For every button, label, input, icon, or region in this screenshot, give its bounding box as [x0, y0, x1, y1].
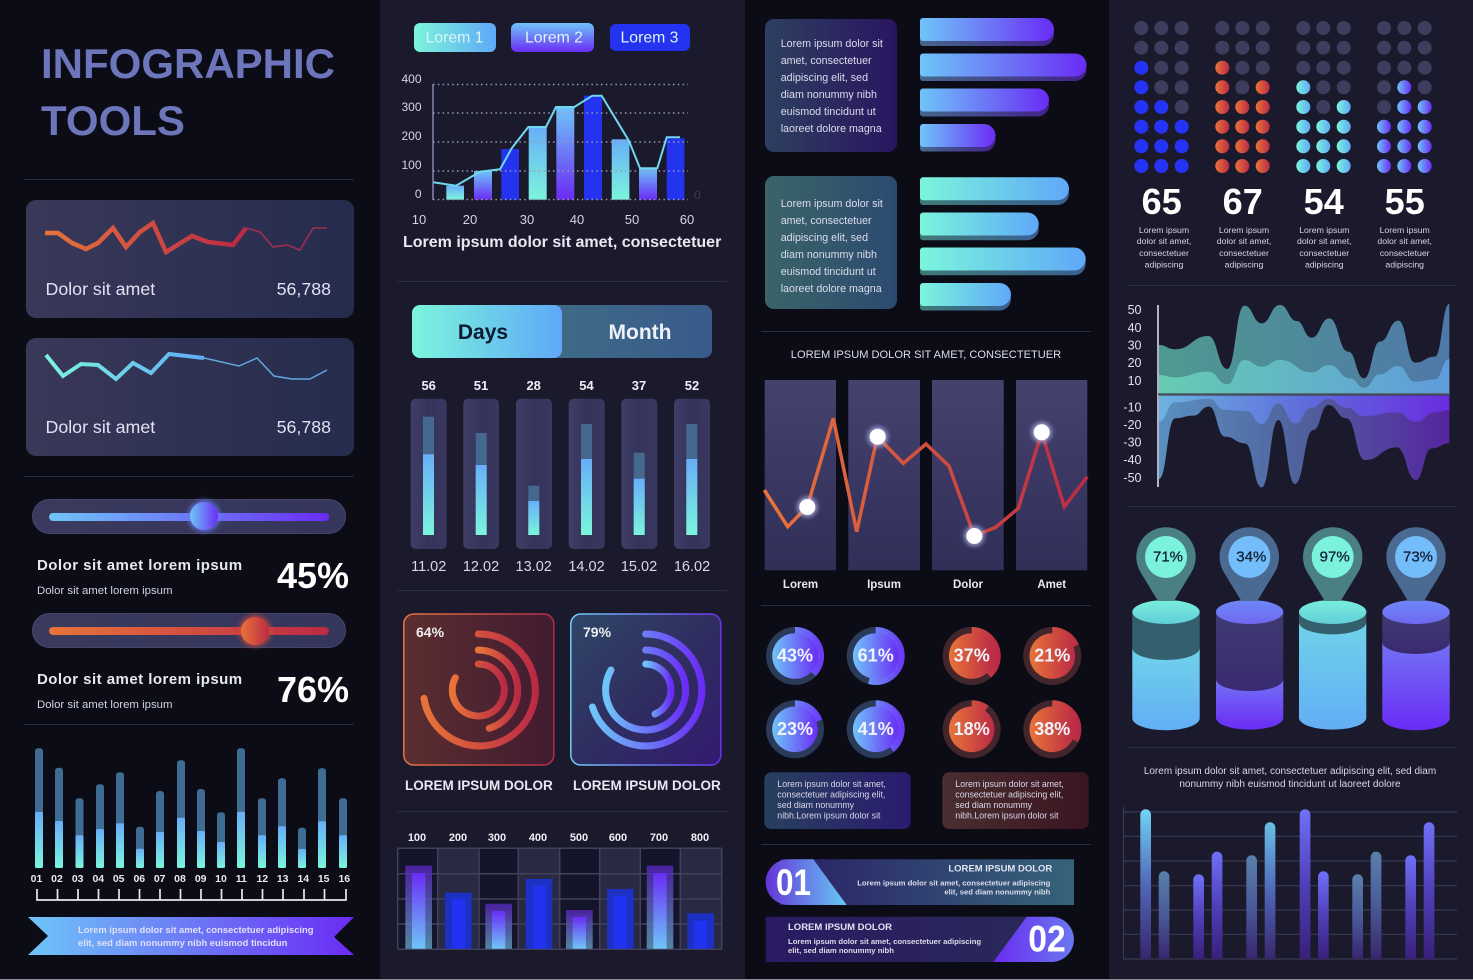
cylinder: 73% — [1382, 527, 1450, 730]
note: red — [942, 772, 1089, 829]
mirrored area chart: 40 — [1128, 321, 1142, 335]
card: orange sparkline: 56,788 — [277, 279, 331, 299]
combo chart: Lorem ipsum dolor sit amet, consectetuer — [403, 234, 721, 251]
column gauges: 14.02 — [568, 559, 605, 575]
bar chart: 16 bars: 08 — [174, 873, 186, 885]
legend buttons: Lorem 3 — [621, 30, 679, 46]
dot matrix: 55: adipiscing — [1385, 260, 1424, 270]
ribbon banner: elit, sed diam nonummy nibh euismod tincidun — [78, 937, 288, 948]
dot matrix: 65: dolor sit amet, — [1137, 236, 1191, 246]
radial card: 79%: LOREM IPSUM DOLOR — [573, 778, 721, 793]
ribbon banner: Lorem ipsum dolor sit amet, consectetuer adipiscing — [78, 924, 314, 935]
donut: red group: 37% — [954, 646, 990, 666]
donut: red group — [943, 627, 1081, 758]
mirrored area chart: 30 — [1128, 338, 1142, 352]
dot matrix: 55: 55 — [1385, 181, 1425, 222]
radial card: 79%: 79% — [583, 624, 612, 640]
note: red: nibh.Lorem ipsum dolor sit — [955, 810, 1059, 820]
horizontal bars: violet — [920, 18, 1086, 152]
dot matrix: 55 — [1377, 21, 1432, 270]
card: teal sparkline: Dolor sit amet — [46, 417, 155, 437]
panel: left column — [0, 0, 380, 980]
column gauges: 54 — [579, 378, 594, 393]
combo chart: 10 — [412, 212, 426, 227]
combo chart: 50 — [625, 212, 639, 227]
grid bar chart: 200 — [449, 832, 467, 844]
dot matrix: 67 — [1215, 21, 1271, 270]
note: red: Lorem ipsum dolor sit amet, — [955, 779, 1064, 789]
title: TOOLS — [41, 97, 185, 144]
bar chart: 16 bars: 03 — [72, 873, 84, 885]
note card: violet: diam nonummy nibh — [781, 89, 877, 101]
grid bar chart: 600 — [609, 832, 627, 844]
panel: fourth column — [1109, 0, 1473, 980]
note card: violet — [765, 19, 897, 152]
column gauges: 16.02 — [674, 559, 710, 575]
dot matrix: 54: Lorem ipsum — [1299, 225, 1349, 235]
banner: 01: LOREM IPSUM DOLOR — [948, 864, 1052, 875]
cylinder: 71% — [1132, 527, 1200, 730]
note card: violet: Lorem ipsum dolor sit — [781, 38, 883, 50]
radial card: 64%: LOREM IPSUM DOLOR — [405, 778, 553, 793]
bar chart: 16 bars: 16 — [338, 873, 350, 885]
column gauges: 51 — [474, 378, 488, 393]
bar chart: 16 bars: 07 — [154, 873, 166, 885]
slider: 45%: 45% — [277, 555, 349, 596]
bar chart: 16 bars: 01 — [31, 873, 42, 885]
bar chart: 16 bars: 02 — [51, 873, 63, 885]
line chart with four panels — [764, 380, 1087, 591]
donut: blue group: 61% — [858, 646, 894, 666]
card: teal sparkline — [26, 338, 354, 456]
horizontal bars: teal — [920, 177, 1086, 310]
mirrored area chart: -40 — [1123, 453, 1142, 467]
note card: violet: euismod tincidunt ut — [781, 106, 876, 118]
banner: 02: LOREM IPSUM DOLOR — [788, 922, 892, 933]
toggle: days / month: Days — [458, 321, 508, 344]
dot matrix: 67: consectetuer — [1219, 248, 1269, 258]
panel: second column — [380, 0, 745, 980]
combo chart — [401, 72, 721, 251]
mirrored area chart: 20 — [1128, 356, 1142, 370]
banner: 01: Lorem ipsum dolor sit amet, consectetuer adipiscing — [857, 878, 1051, 888]
grid bar chart: 300 — [488, 832, 506, 844]
text block: Lorem ipsum dolor sit amet, consectetuer adipiscing elit, sed diam — [1144, 766, 1436, 777]
banner: 02: Lorem ipsum dolor sit amet, consectetuer adipiscing — [788, 937, 981, 946]
grid bar chart: 500 — [570, 832, 588, 844]
combo chart: 30 — [520, 212, 534, 227]
title: INFOGRAPHIC — [41, 40, 335, 87]
combo chart: 100 — [401, 158, 422, 172]
banner: 01: elit, sed diam nonummy nibh — [944, 888, 1051, 896]
mirrored area chart: -30 — [1123, 436, 1142, 450]
column gauges: 11.02 — [411, 559, 446, 575]
dot matrix: 67: Lorem ipsum — [1219, 225, 1269, 235]
column gauges: 12.02 — [463, 559, 499, 575]
banner: 01 — [766, 859, 1074, 905]
column gauges: 37 — [632, 378, 646, 393]
donut: red group: 21% — [1034, 646, 1070, 666]
note: blue: nibh.Lorem ipsum dolor sit — [777, 810, 881, 820]
dot matrix: 67: 67 — [1223, 181, 1263, 222]
dot matrix: 54: dolor sit amet, — [1297, 236, 1352, 246]
ribbon banner — [28, 917, 354, 955]
bar chart: 16 bars: 14 — [297, 873, 309, 885]
slider: 76% — [32, 614, 349, 711]
bar chart: 16 bars: 10 — [215, 873, 227, 885]
dot matrix: 67: dolor sit amet, — [1217, 236, 1271, 246]
dot matrix: 65: consectetuer — [1139, 248, 1189, 258]
grid bar chart: 400 — [529, 832, 547, 844]
legend buttons: Lorem 1 — [426, 30, 484, 46]
donut: red group: 18% — [954, 719, 990, 739]
slider: 45%: Dolor sit amet lorem ipsum — [37, 557, 243, 574]
bar chart: 16 bars — [31, 748, 350, 900]
grid bar chart: 100 — [408, 832, 426, 844]
slider: 76%: Dolor sit amet lorem ipsum — [37, 671, 243, 688]
card: orange sparkline: Dolor sit amet — [46, 279, 155, 299]
note card: teal: diam nonummy nibh — [781, 249, 877, 261]
cylinder: 71%: 71% — [1153, 549, 1183, 566]
text block — [1144, 766, 1436, 790]
combo chart: 20 — [463, 212, 477, 227]
cylinder: 97% — [1299, 527, 1366, 730]
dot matrix: 55: dolor sit amet, — [1377, 236, 1432, 246]
bar chart: 16 bars: 13 — [277, 873, 289, 885]
mirrored area chart: -20 — [1123, 418, 1142, 432]
combo chart: 0 — [694, 188, 701, 202]
rounded bar chart — [1124, 807, 1457, 959]
note: blue: Lorem ipsum dolor sit amet, — [777, 779, 886, 789]
card: teal sparkline: 56,788 — [277, 417, 331, 437]
dot matrix: 54: 54 — [1304, 181, 1344, 222]
bar chart: 16 bars: 04 — [92, 873, 104, 885]
dot matrix: 65: Lorem ipsum — [1139, 225, 1189, 235]
panel: third column — [745, 0, 1109, 980]
radial card: 79% — [571, 614, 721, 793]
combo chart: 60 — [680, 212, 694, 227]
combo chart: 300 — [401, 100, 422, 114]
bar chart: 16 bars: 15 — [318, 873, 330, 885]
note: blue: sed diam nonummy — [777, 800, 855, 810]
grid bar chart: 700 — [650, 832, 668, 844]
legend buttons: Lorem 2 — [525, 30, 583, 46]
donut: blue group: 43% — [777, 646, 813, 666]
note: red: consectetuer adipiscing elit, — [955, 790, 1063, 800]
donut: red group: 38% — [1034, 719, 1070, 739]
mirrored area chart — [1123, 303, 1450, 487]
cylinder: 34%: 34% — [1236, 549, 1266, 566]
slider: 76%: Dolor sit amet lorem ipsum — [37, 699, 172, 711]
note card: teal: adipiscing elit, sed — [781, 232, 868, 244]
note card: violet: laoreet dolore magna — [781, 123, 882, 135]
note: red: sed diam nonummy — [955, 800, 1033, 810]
note: blue — [764, 772, 911, 829]
radial card: 64%: 64% — [416, 624, 445, 640]
note card: violet: adipiscing elit, sed — [781, 72, 868, 84]
toggle: days / month: Month — [609, 321, 671, 344]
column gauges: 13.02 — [516, 559, 552, 575]
note card: violet: amet, consectetuer — [781, 55, 872, 67]
radial card: 64% — [404, 614, 554, 793]
line chart with four panels: Amet — [1037, 579, 1066, 591]
mirrored area chart: 50 — [1128, 303, 1142, 317]
bar chart: 16 bars: 11 — [236, 873, 247, 885]
grid bar chart — [398, 832, 722, 949]
bar chart: 16 bars: 09 — [195, 873, 207, 885]
dot matrix: 55: consectetuer — [1380, 248, 1430, 258]
banner: 02: elit, sed diam nonummy nibh — [788, 946, 894, 955]
column gauges: 52 — [685, 378, 699, 393]
legend buttons — [414, 23, 690, 52]
dot matrix: 54: adipiscing — [1305, 260, 1344, 270]
toggle: days / month — [412, 305, 712, 358]
dot matrix: 65 — [1134, 21, 1191, 270]
grid bar chart: 800 — [691, 832, 709, 844]
title — [41, 40, 335, 144]
dot matrix: 65: adipiscing — [1145, 260, 1183, 270]
note: blue: consectetuer adipiscing elit, — [777, 790, 885, 800]
banner: 01: 01 — [776, 862, 811, 903]
dot matrix: 67: adipiscing — [1225, 260, 1263, 270]
donut: blue group: 41% — [858, 719, 894, 739]
line chart with four panels: Dolor — [953, 579, 984, 591]
note card: teal: amet, consectetuer — [781, 215, 872, 227]
combo chart: 200 — [401, 129, 422, 143]
column gauges: 56 — [421, 378, 436, 393]
heading: line chart: LOREM IPSUM DOLOR SIT AMET, CONSECTETUER — [791, 349, 1061, 361]
cylinder: 73%: 73% — [1403, 549, 1433, 566]
mirrored area chart: 10 — [1128, 374, 1142, 388]
card: orange sparkline — [26, 200, 354, 318]
text block: nonummy nibh euismod tincidunt ut laoreet dolore — [1179, 779, 1401, 790]
bar chart: 16 bars: 12 — [256, 873, 268, 885]
dot matrix: 55: Lorem ipsum — [1380, 225, 1430, 235]
combo chart: 0 — [415, 187, 422, 201]
dot matrix: 54: consectetuer — [1299, 248, 1349, 258]
dot matrix: 54 — [1296, 21, 1352, 270]
combo chart: 400 — [401, 72, 422, 86]
cylinder: 97%: 97% — [1320, 549, 1350, 566]
cylinder: 34% — [1216, 527, 1283, 730]
slider: 45% — [32, 500, 349, 597]
note card: teal — [765, 176, 897, 309]
slider: 76%: 76% — [277, 669, 349, 710]
note card: teal: euismod tincidunt ut — [781, 266, 876, 278]
column gauges: 28 — [526, 378, 541, 393]
donut: blue group: 23% — [777, 719, 813, 739]
note card: teal: Lorem ipsum dolor sit — [781, 198, 883, 210]
banner: 02: 02 — [1028, 919, 1066, 960]
column gauges: 15.02 — [621, 559, 657, 575]
slider: 45%: Dolor sit amet lorem ipsum — [37, 585, 172, 597]
combo chart: 40 — [570, 212, 584, 227]
mirrored area chart: -10 — [1123, 400, 1142, 414]
note card: teal: laoreet dolore magna — [781, 283, 882, 295]
dot matrix: 65: 65 — [1142, 181, 1182, 222]
mirrored area chart: -50 — [1123, 471, 1142, 485]
banner: 02 — [766, 917, 1074, 962]
bar chart: 16 bars: 06 — [133, 873, 145, 885]
bar chart: 16 bars: 05 — [113, 873, 125, 885]
line chart with four panels: Ipsum — [867, 579, 901, 591]
donut: blue group — [766, 627, 905, 758]
column gauges — [411, 378, 710, 575]
line chart with four panels: Lorem — [783, 579, 818, 591]
